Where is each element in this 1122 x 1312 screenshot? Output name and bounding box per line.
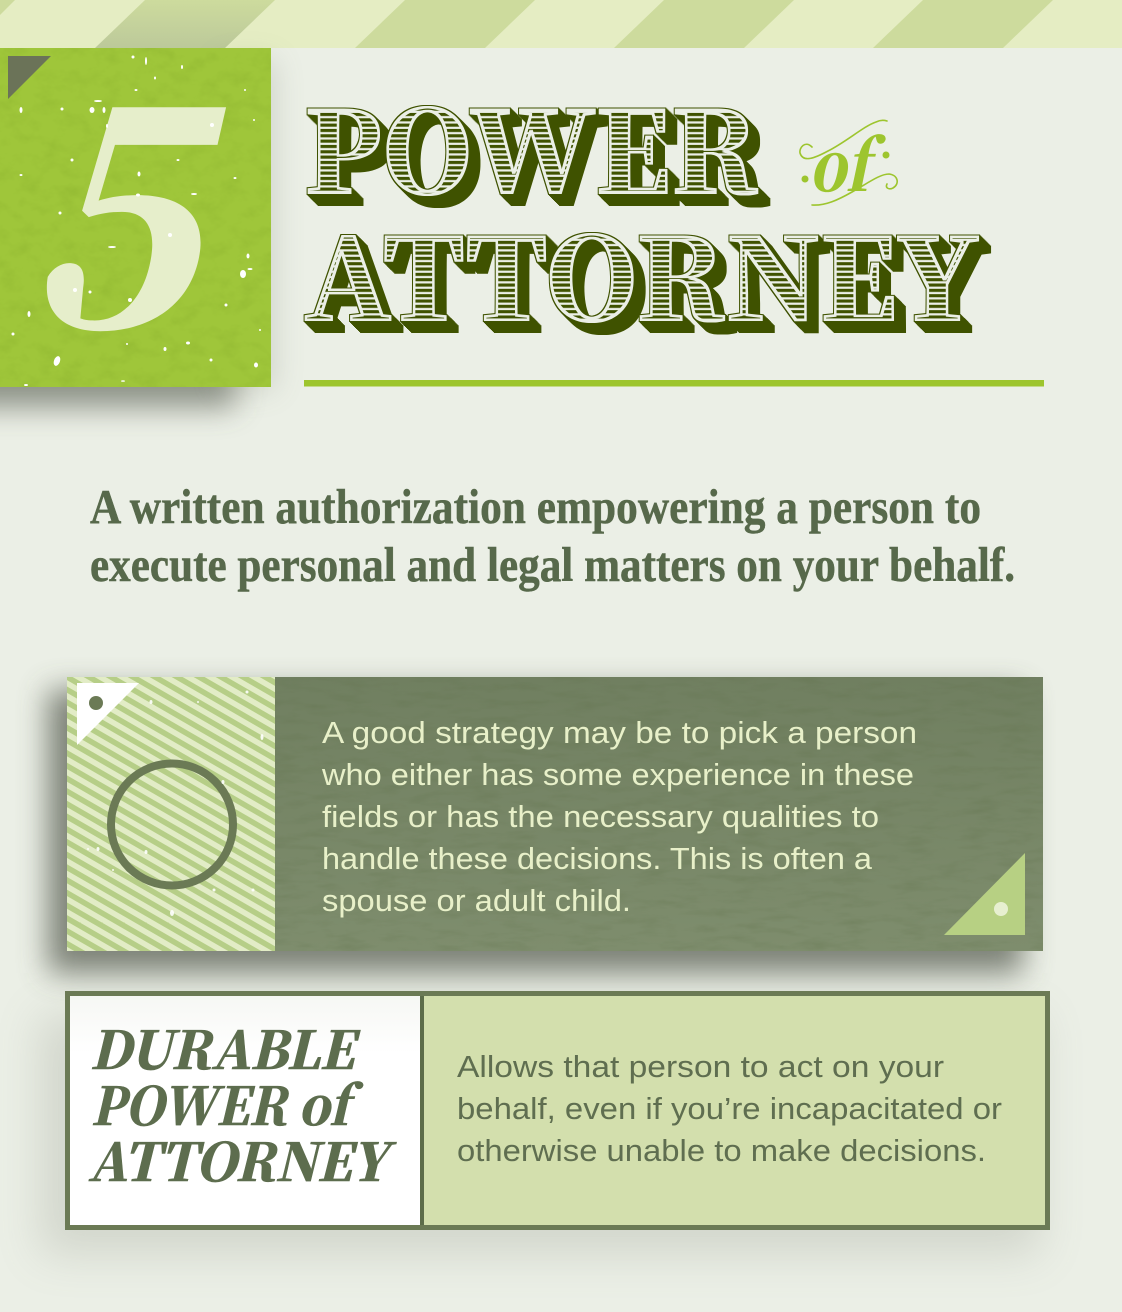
stripe speckles [87,690,264,916]
dark block texture [275,677,1043,951]
green description cell [424,996,1045,1225]
striped icon block [67,677,275,951]
striped top band [0,0,1122,48]
square texture [0,48,271,387]
intro statement: A written authorization empowering a person to [90,479,981,534]
description [457,1049,1002,1168]
panel: durable power of attorney [40,991,1050,1255]
panel border [65,991,1050,1230]
dark text block [275,677,1043,951]
of word: of [809,114,886,211]
heading: ATTORNEY [88,1121,397,1196]
title underline [304,380,1044,386]
tip text: A good strategy may be to pick a person [322,715,917,750]
ring icon [111,764,233,886]
title: POWER [304,65,979,353]
square right edge shadow [220,60,275,390]
tip text [321,715,917,918]
panel: strategy tip [48,677,1043,973]
green square [0,48,271,387]
description: otherwise unable to make decisions. [457,1133,986,1168]
title: POWER: POWER [304,65,758,226]
tip text: fields or has the necessary qualities to [322,799,879,834]
cell divider [420,996,424,1225]
intro statement [90,479,1015,592]
title: ATTORNEY: ATTORNEY [304,192,979,353]
square shadow [0,345,235,407]
panel: green number square [0,0,275,414]
heading: DURABLE [90,1009,361,1084]
tip text: who either has some experience in these [321,757,914,792]
heading: POWER of [91,1065,364,1140]
panel shadow [40,1015,1040,1255]
triangle bottom right with dot [944,853,1025,935]
tip text: spouse or adult child. [322,883,631,918]
description: Allows that person to act on your [457,1049,944,1084]
intro statement: execute personal and legal matters on your behalf. [90,537,1015,592]
heading [88,1009,397,1196]
white speckles [12,56,261,386]
corner triangle with dot [77,683,139,745]
tip text: handle these decisions. This is often a [322,841,873,876]
flourishes and dots [800,120,897,205]
description: behalf, even if you’re incapacitated or [457,1091,1002,1126]
title ornament: of [800,114,897,211]
white heading cell [70,996,420,1225]
corner triangle [8,56,51,99]
panel shadow [48,690,1023,973]
